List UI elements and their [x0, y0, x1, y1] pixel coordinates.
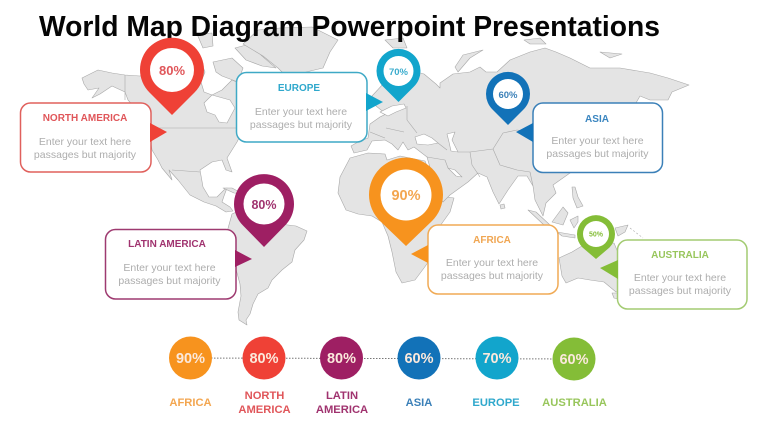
stat: north america	[238, 336, 291, 416]
stat: australia	[542, 338, 607, 409]
landmass: Australia	[559, 243, 630, 292]
inland seas: Baltic, Black Sea, Caspian, Persian Gulf	[380, 104, 462, 177]
pin: africa 90%	[369, 158, 443, 246]
pin: asia 60%	[486, 72, 530, 125]
stat: europe: EUROPE	[472, 397, 520, 409]
pin: asia 60%: 60%	[498, 90, 518, 101]
pin: north america 80%	[140, 38, 204, 115]
callout box	[618, 240, 747, 309]
heading: AFRICA	[473, 235, 511, 246]
pin: latin america 80%: 80%	[251, 198, 277, 212]
landmass: Japan and Sri Lanka	[500, 106, 644, 209]
heading: AUSTRALIA	[651, 250, 709, 261]
callout box	[428, 225, 558, 294]
text block: passages but majority	[629, 285, 732, 297]
stat: africa	[169, 336, 212, 409]
pin: europe 70%	[376, 49, 420, 102]
arrow	[600, 260, 618, 279]
stat: latin america: AMERICA	[316, 404, 368, 416]
text block: passages but majority	[546, 148, 649, 160]
panel: latin america	[106, 230, 252, 299]
pin: europe 70%: 70%	[389, 67, 409, 78]
landmass: Melanesia	[630, 228, 643, 238]
dotted connector	[190, 358, 574, 359]
pin: north america 80%: 80%	[159, 63, 185, 78]
callout box	[533, 103, 662, 172]
landmass: Africa	[338, 153, 454, 283]
text block: passages but majority	[34, 149, 137, 161]
callout box	[236, 72, 367, 142]
landmass: Madagascar	[435, 246, 445, 270]
heading: EUROPE	[278, 83, 320, 94]
text block: passages but majority	[118, 275, 221, 287]
landmass: Novaya Zemlya and Arctic isles	[385, 38, 622, 72]
stat: europe	[472, 336, 520, 409]
landmass: South America	[227, 208, 307, 325]
text block: passages but majority	[441, 270, 544, 282]
landmass: Great Britain	[356, 106, 366, 124]
landmass: North and Central America	[82, 55, 252, 212]
text block: Enter your text here	[634, 272, 726, 284]
stat: australia: 60%	[559, 352, 589, 368]
text block: Enter your text here	[255, 106, 347, 118]
stat: africa: 90%	[176, 351, 205, 367]
pin: australia 50%: 50%	[589, 232, 604, 238]
landmass: Philippines and Borneo	[552, 187, 583, 225]
text block: Enter your text here	[446, 257, 538, 269]
stat: asia: ASIA	[406, 397, 432, 409]
landmass: Greenland	[243, 27, 338, 80]
title: World Map Diagram Powerpoint Presentations	[39, 11, 660, 43]
country borders	[125, 75, 533, 186]
callout box	[20, 103, 151, 172]
arrow	[411, 245, 428, 263]
stat: europe: 70%	[482, 351, 512, 367]
stat: latin america: LATIN	[326, 390, 358, 402]
heading: ASIA	[585, 114, 609, 125]
stat: north america: AMERICA	[238, 404, 291, 416]
stat: asia	[398, 336, 440, 409]
text block: Enter your text here	[39, 136, 131, 148]
stat: asia: 60%	[404, 351, 434, 367]
stat: north america: NORTH	[245, 390, 284, 402]
stat: africa: AFRICA	[169, 397, 212, 409]
landmass: Cuba	[223, 188, 243, 194]
callout box	[106, 230, 236, 299]
heading: NORTH AMERICA	[43, 113, 127, 124]
stat: australia: AUSTRALIA	[542, 397, 607, 409]
panel: africa	[411, 225, 558, 294]
text block: passages but majority	[250, 119, 353, 131]
arrow	[516, 123, 533, 142]
arrow	[235, 250, 252, 267]
panel: australia	[600, 240, 747, 309]
panel: europe	[236, 72, 383, 142]
text block: Enter your text here	[551, 135, 644, 147]
landmass: Tasmania	[612, 293, 620, 299]
panel: north america	[20, 103, 167, 172]
heading: LATIN AMERICA	[128, 239, 206, 250]
landmass: New Guinea	[615, 225, 628, 236]
landmass: Sumatra, Java and Sulawesi	[528, 210, 578, 238]
hudson bay	[204, 95, 235, 123]
pin: australia 50%	[577, 215, 615, 259]
arrow	[150, 123, 167, 142]
arrow	[366, 93, 383, 111]
stat: north america: 80%	[249, 351, 279, 367]
panel: asia	[516, 103, 662, 172]
landmass: Eurasia	[351, 48, 689, 216]
landmass: Canadian Arctic islands	[197, 33, 276, 82]
pin: latin america 80%	[234, 174, 294, 247]
text block: Enter your text here	[123, 262, 216, 274]
stat: latin america: 80%	[327, 351, 356, 367]
stat: latin america	[316, 336, 368, 416]
world map	[82, 27, 689, 325]
pin: africa 90%: 90%	[391, 188, 421, 204]
